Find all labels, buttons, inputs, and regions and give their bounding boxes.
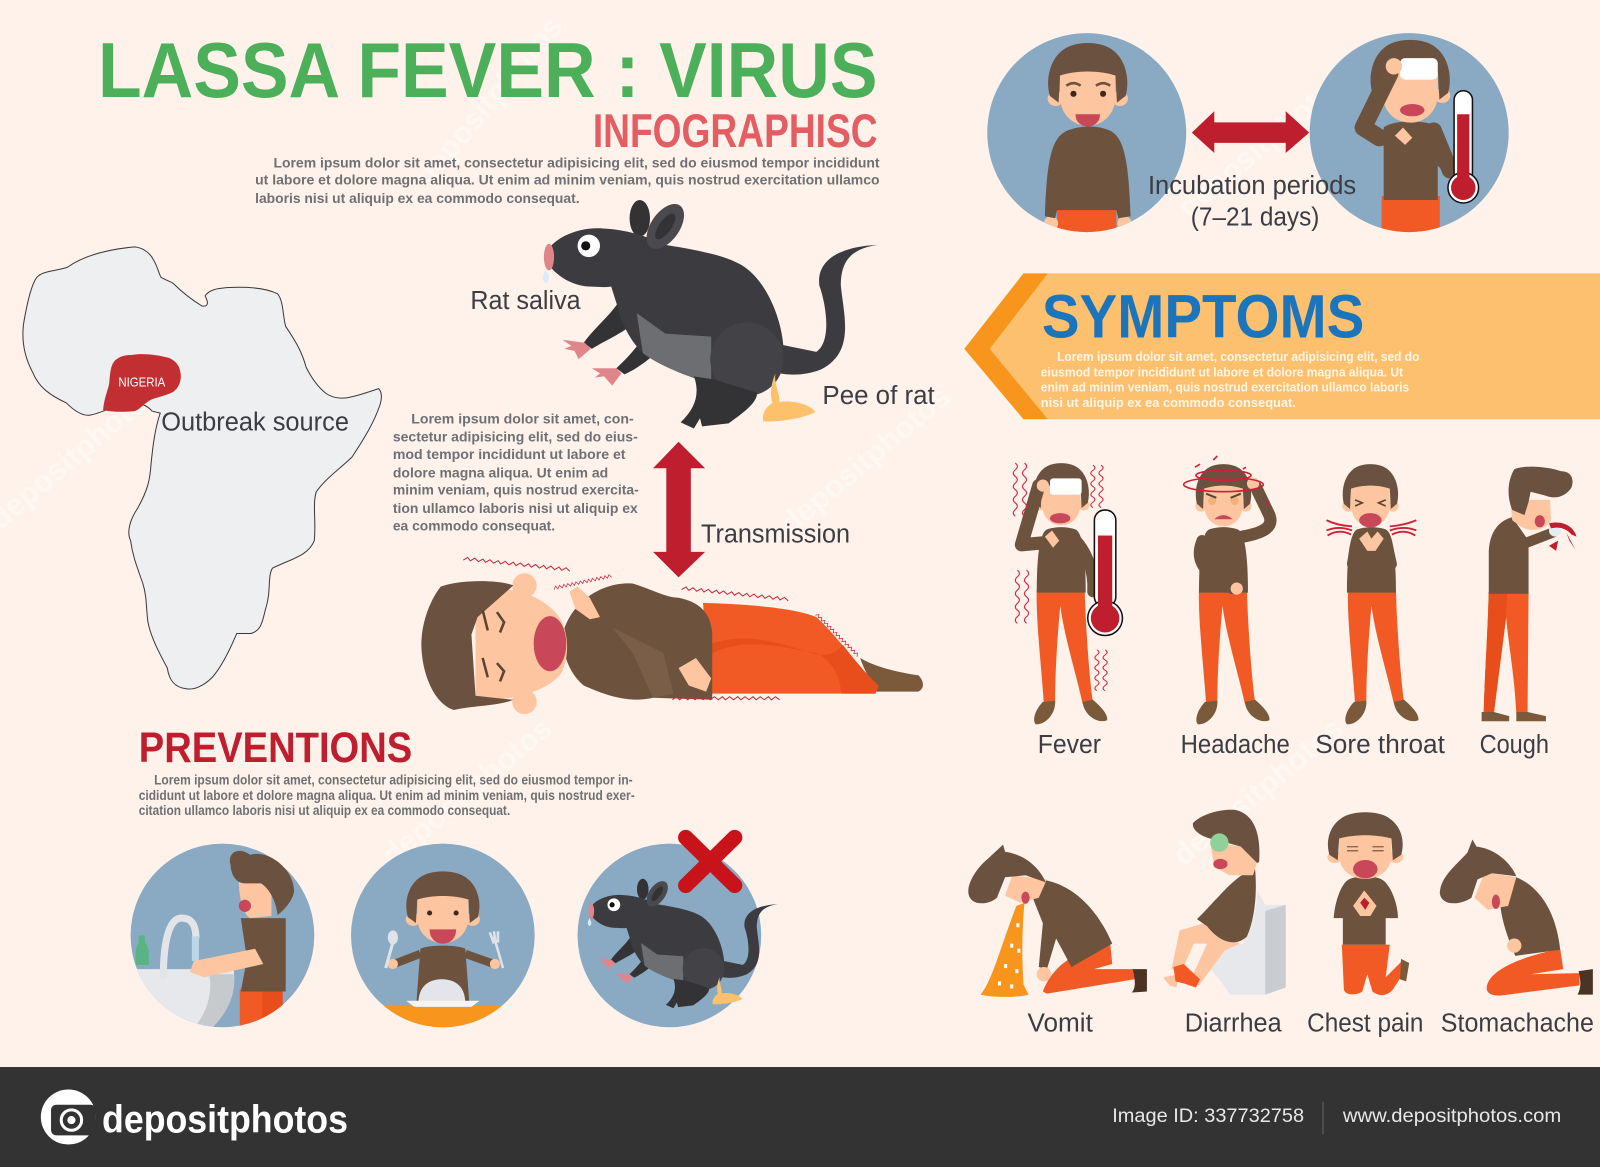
symptom: vomit [968,845,1147,1037]
toilet [1207,890,1286,995]
red cross icon [686,838,735,885]
symptom: diarrhea [1163,810,1286,1037]
symptoms text: eiusmod tempor incididunt ut labore et dolore magna aliqua. Ut [1041,364,1404,379]
intro text block: laboris nisi ut aliquip ex ea commodo consequat. [255,191,580,207]
arrow: transmission [653,442,705,577]
thermometer [1088,510,1122,636]
soap bottle [136,935,149,965]
arrow: incubation [1192,111,1309,153]
symptom: stomachache [1440,840,1594,1037]
pee of rat label: Pee of rat [822,382,935,410]
throat pain marks [1327,520,1416,536]
incubation label: (7–21 days) [1191,203,1319,231]
prevention: eat clean food [351,844,535,1030]
transmission text block: mod tempor incididunt ut labore et [393,447,626,463]
symptom: headache [1181,456,1290,759]
person [241,918,286,992]
shiver marks [463,557,859,700]
intro text block: Lorem ipsum dolor sit amet, consectetur adipisicing elit, sed do eiusmod tempor incididunt [273,155,880,171]
transmission text block: Lorem ipsum dolor sit amet, con- [411,411,634,427]
preventions text block: cididunt ut labore et dolore magna aliqua. Ut enim ad minim veniam, quis nostrud exer- [139,788,635,804]
transmission label: Transmission [701,521,850,549]
spoon and fork [386,943,393,968]
symptoms text [1041,349,1419,410]
preventions text block [139,772,635,819]
transmission text block: tion ullamco laboris nisi ut aliquip ex [393,501,638,517]
stomachache label: Stomachache [1441,1009,1594,1037]
transmission text block [393,411,639,534]
symptoms text: Lorem ipsum dolor sit amet, consectetur adipisicing elit, sed do [1057,349,1419,364]
lying sick person [421,557,923,714]
symptoms banner [964,273,1600,419]
preventions text block: Lorem ipsum dolor sit amet, consectetur adipisicing elit, sed do eiusmod tempor in- [154,772,633,788]
highlighted region: Nigeria [103,354,181,412]
watermark: depositphotos [773,379,957,541]
sore throat label: Sore throat [1315,731,1445,759]
outbreak source label: Outbreak source [161,408,349,436]
transmission text block: sectetur adipisicing elit, sed do eius- [393,430,638,446]
circle: sick person with thermometer [1310,33,1509,233]
prevention: avoid rats [578,838,778,1027]
incubation label: Incubation periods [1148,172,1356,200]
title: LASSA FEVER : VIRUS [98,28,878,114]
intro text block [255,155,880,207]
headache label: Headache [1181,731,1290,759]
transmission text block: minim veniam, quis nostrud exercita- [393,483,639,499]
subtitle: INFOGRAPHISC [593,105,878,157]
logo icon: camera [41,1089,96,1145]
symptom: sore throat [1315,464,1445,759]
blood spray [1549,523,1577,551]
chest pain label: Chest pain [1307,1009,1423,1037]
rat saliva label: Rat saliva [470,287,581,315]
symptoms text: enim ad minim veniam, quis nostrud exercitation ullamco laboris [1041,380,1409,395]
cough label: Cough [1480,731,1549,759]
faucet [163,918,196,979]
intro text block: ut labore et dolore magna aliqua. Ut enim ad minim veniam, quis nostrud exercitation ullamco [255,173,880,189]
thermometer [1448,91,1479,203]
rat illustration [543,197,878,428]
fever label: Fever [1038,731,1102,759]
map of Africa [23,247,381,689]
preventions heading: PREVENTIONS [139,724,412,772]
preventions text block: citation ullamco laboris nisi ut aliquip ex ea commodo consequat. [139,803,510,819]
dizziness rings [1184,456,1269,506]
symptom: fever [1013,463,1122,759]
watermark [0,10,1355,872]
transmission text block: dolore magna aliqua. Ut enim ad [393,465,608,481]
footer bar [0,1067,1600,1167]
symptom: chest pain [1307,812,1423,1037]
watermark: depositphotos [375,711,559,872]
shiver marks [1013,463,1107,691]
circle: healthy person [987,33,1186,235]
watermark: depositphotos [408,10,569,193]
watermark: depositphotos [1166,711,1350,872]
website: www.depositphotos.com [1342,1105,1561,1127]
symptoms text: nisi ut aliquip ex ea commodo consequat. [1041,395,1296,410]
incubation label [1148,172,1356,231]
symptom: cough [1480,467,1577,759]
diarrhea label: Diarrhea [1185,1009,1282,1037]
divider [1322,1102,1323,1134]
Nigeria label: NIGERIA [118,375,166,390]
dish [418,979,465,1004]
vomit label: Vomit [1028,1009,1093,1037]
prevention: wash hands [131,844,314,1030]
logo wordmark: depositphotos [102,1098,348,1141]
watermark: depositphotos [1171,63,1355,225]
image id: Image ID: 337732758 [1112,1105,1304,1127]
symptoms heading: SYMPTOMS [1042,283,1364,351]
transmission text block: ea commodo consequat. [393,518,555,534]
